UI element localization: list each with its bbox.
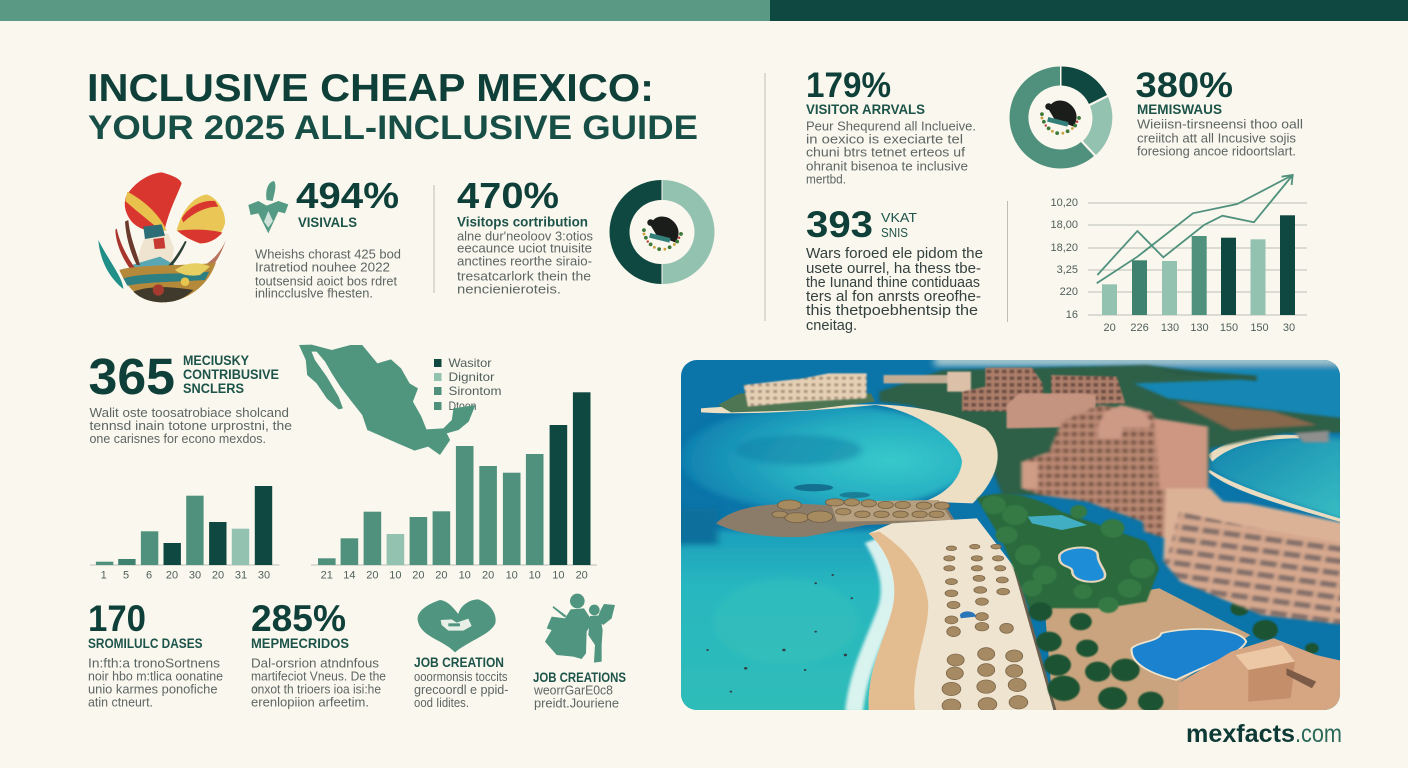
stat: 179% visitor arrivals: chuni btrs tetnet erteos uf bbox=[806, 144, 965, 160]
stat: 393: VKAT bbox=[881, 210, 917, 225]
stat: 494% visivals: Wheishs chorast 425 bod bbox=[255, 246, 401, 262]
stat: 470% visitors contribution bbox=[457, 175, 593, 296]
stat: 393: SNIS bbox=[881, 225, 908, 240]
right bar chart: 10 bbox=[529, 570, 541, 582]
stat: 170: SROMILULC DASES bbox=[88, 636, 202, 651]
right bar chart: 20 bbox=[576, 570, 588, 582]
main hotels bbox=[1021, 405, 1345, 625]
stat: 179% visitor arrivals: ohranit bisenoa te inclusive bbox=[806, 158, 968, 174]
stat: 285%: 285% bbox=[251, 598, 346, 639]
top banner band bbox=[0, 0, 1408, 21]
palm gardens bbox=[977, 494, 1319, 712]
stat: 494% visivals: VISIVALS bbox=[298, 215, 357, 230]
stat: 380%: foresiong ancoe ridoortslart. bbox=[1137, 144, 1296, 158]
combo chart: bars with trend lines: 130 bbox=[1161, 322, 1179, 334]
combo chart: bars with trend lines: 3,25 bbox=[1057, 264, 1078, 276]
stat: 380%: 380% bbox=[1136, 66, 1233, 105]
stat: 170: noir hbo m:tlica oonatine bbox=[88, 668, 223, 684]
brand wordmark bbox=[1186, 720, 1342, 748]
right bar chart: 10 bbox=[389, 570, 402, 582]
left bar chart: 6 bbox=[146, 570, 152, 582]
stat: 393: the Iunand thine contiduaas bbox=[806, 275, 980, 291]
combo chart: bars with trend lines: 18,20 bbox=[1050, 242, 1078, 254]
icon: green torch emblem bbox=[248, 181, 288, 233]
left bar chart: 30 bbox=[258, 570, 270, 582]
stat: job creation bbox=[414, 655, 508, 710]
right bar chart: 10 bbox=[459, 570, 471, 582]
combo chart: bars with trend lines: 16 bbox=[1066, 309, 1078, 321]
stat: 285%: onxot th trioers ioa isi:he bbox=[251, 682, 381, 696]
stat: 380%: creiitch att all Incusive sojis bbox=[1137, 130, 1297, 146]
resort ground bbox=[1045, 588, 1250, 712]
corner building bbox=[1178, 638, 1345, 712]
brand wordmark: mexfacts bbox=[1186, 720, 1295, 748]
title: YOUR 2025 ALL-INCLUSIVE GUIDE bbox=[88, 109, 698, 147]
left bar chart: 20 bbox=[212, 570, 224, 582]
stat: 285% bbox=[251, 598, 386, 710]
brand wordmark: .com bbox=[1295, 720, 1342, 748]
stat: 494% visivals: 494% bbox=[296, 175, 399, 216]
stat: 494% visivals: Iratretiod nouhee 2022 bbox=[255, 260, 390, 274]
stat: job creation: grecoordl e ppid- bbox=[414, 682, 508, 697]
right bar chart: 20 bbox=[412, 570, 425, 582]
combo chart: bars with trend lines: 226 bbox=[1130, 322, 1149, 334]
stat: 470% visitors contribution: eecaunce uciot tnuisite bbox=[457, 240, 592, 256]
stat: 365: 365 bbox=[88, 348, 175, 405]
stat: job creation: ooormonsis toccits bbox=[414, 669, 508, 684]
stat: 365: one carisnes for econo mexdos. bbox=[90, 431, 266, 446]
left bar chart: 20 bbox=[166, 570, 178, 582]
map legend: Dignitor bbox=[448, 370, 494, 384]
map legend: Sirontom bbox=[448, 384, 502, 398]
background land bbox=[879, 365, 1345, 495]
stat: 285%: martifeciot Vneus. De the bbox=[251, 668, 386, 684]
stat: 494% visivals: inlinccluslve fhesten. bbox=[255, 286, 373, 300]
stat: 365: SNCLERS bbox=[183, 381, 244, 396]
stat: job creations bbox=[533, 670, 626, 710]
stat: 380%: MEMISWAUS bbox=[1137, 102, 1222, 117]
left bar chart: 1 bbox=[101, 570, 107, 582]
right bar chart bbox=[311, 392, 597, 582]
stat: 365: MECIUSKY bbox=[183, 353, 249, 368]
illustration: colourful folk art balloons bbox=[98, 172, 226, 302]
stat: 393: 393 bbox=[806, 204, 873, 245]
combo chart: bars with trend lines: 150 bbox=[1250, 322, 1269, 334]
divider bbox=[1007, 201, 1008, 322]
icon: green heart with car bbox=[418, 599, 496, 652]
right bar chart: 21 bbox=[321, 570, 333, 582]
stat: 393: cneitag. bbox=[806, 318, 857, 334]
left bar chart: 31 bbox=[235, 570, 247, 582]
stat: 179% visitor arrivals: mertbd. bbox=[806, 172, 846, 186]
photo: aerial view of beach resort bbox=[672, 355, 1345, 717]
stat: 393: Wars foroed ele pidom the bbox=[806, 246, 983, 262]
right bar chart: 10 bbox=[552, 570, 565, 582]
stat: 170: In:fth:a tronoSortnens bbox=[88, 656, 221, 670]
swimmers bbox=[706, 574, 853, 693]
stat: 285%: erenlopiion arfeetim. bbox=[251, 694, 369, 710]
stat: 285%: Dal-orsrion atndnfous bbox=[251, 656, 380, 670]
combo chart: bars with trend lines: 30 bbox=[1283, 322, 1295, 334]
map legend: Wasitor bbox=[448, 356, 492, 370]
right bar chart: 14 bbox=[343, 570, 356, 582]
icon: Mexican emblem bbox=[1040, 100, 1081, 135]
combo chart: bars with trend lines: 130 bbox=[1190, 322, 1209, 334]
stat: 470% visitors contribution: Visitops cortribution bbox=[457, 214, 588, 230]
stat: 393: ters al fon anrsts oreofhe- bbox=[806, 289, 981, 305]
divider bbox=[764, 73, 766, 321]
stat: 380%: Wieiisn-tirsneensi thoo oall bbox=[1137, 116, 1303, 132]
combo chart: bars with trend lines: 150 bbox=[1220, 322, 1238, 334]
stat: job creations: preidt.Jouriene bbox=[534, 696, 619, 710]
icon: Mexican emblem bbox=[642, 216, 683, 251]
stat: 365 bbox=[88, 348, 292, 446]
stat: 170: 170 bbox=[88, 598, 146, 639]
background hotels bbox=[744, 368, 1125, 428]
combo chart: bars with trend lines: 18,00 bbox=[1050, 219, 1078, 231]
stat: job creation: JOB CREATION bbox=[414, 655, 504, 670]
stat: 393: usete ourrel, ha thess tbe- bbox=[806, 261, 981, 277]
stat: 179% visitor arrivals: in oexico is execiarte tel bbox=[806, 132, 963, 146]
left bar chart: 5 bbox=[123, 570, 129, 582]
right bar chart: 10 bbox=[506, 570, 518, 582]
stat: 393 bbox=[806, 204, 983, 334]
divider bbox=[434, 185, 435, 293]
stat: 170: unio karmes ponofiche bbox=[88, 682, 218, 696]
title bbox=[87, 67, 698, 147]
stat: 470% visitors contribution: 470% bbox=[457, 175, 559, 216]
stat: job creation: ood Iidites. bbox=[414, 695, 469, 710]
stat: 365: tennsd inain totone urprostni, the bbox=[90, 418, 292, 433]
pools bbox=[1059, 547, 1105, 582]
stat: job creations: JOB CREATIONS bbox=[533, 670, 626, 685]
stat: 470% visitors contribution: anctines reorthe siraio- bbox=[457, 254, 592, 268]
stat: 179% visitor arrivals: VISITOR ARRVALS bbox=[806, 102, 925, 117]
stat: 365: CONTRIBUSIVE bbox=[183, 367, 279, 382]
stat: 494% visivals: toutsensid aoict bos rdret bbox=[255, 274, 397, 288]
stat: 179% visitor arrivals bbox=[806, 66, 976, 186]
donut chart with emblem: 470% bbox=[610, 180, 714, 284]
stat: 470% visitors contribution: nencienieroteis. bbox=[457, 282, 561, 296]
stat: 470% visitors contribution: alne dur'neoloov 3:otios bbox=[457, 228, 593, 244]
combo chart: bars with trend lines: 10,20 bbox=[1050, 197, 1078, 209]
stat: 179% visitor arrivals: 179% bbox=[806, 66, 891, 105]
stat: 285%: MEPMECRIDOS bbox=[251, 636, 349, 651]
lower beach bbox=[869, 518, 1055, 712]
stat: job creations: weorrGarE0c8 bbox=[533, 682, 613, 698]
combo chart: bars with trend lines: 20 bbox=[1103, 322, 1116, 334]
stat: 393: this thetpoebhentsip the bbox=[806, 303, 978, 319]
map of Mexico bbox=[299, 345, 475, 455]
breakwater with huts bbox=[716, 502, 956, 537]
right bar chart: 20 bbox=[482, 570, 494, 582]
right bar chart: 20 bbox=[366, 570, 379, 582]
stat: 365: Walit oste toosatrobiace sholcand bbox=[90, 405, 289, 420]
stat: 170: atin ctneurt. bbox=[88, 694, 153, 710]
map legend bbox=[434, 356, 502, 413]
stat: 380% bbox=[1136, 66, 1303, 158]
stat: 494% visivals bbox=[255, 175, 401, 300]
beach umbrellas bbox=[942, 544, 1028, 712]
combo chart: bars with trend lines bbox=[1050, 175, 1307, 334]
map legend: Dtoon bbox=[448, 399, 476, 413]
stat: 179% visitor arrivals: Peur Shequrend all Inclueive. bbox=[806, 118, 976, 134]
stat: 170 bbox=[88, 598, 223, 710]
icon: silhouette of family bbox=[545, 594, 615, 663]
stat: 470% visitors contribution: tresatcarlork thein the bbox=[457, 268, 591, 284]
combo chart: bars with trend lines: 220 bbox=[1060, 286, 1078, 298]
donut chart with emblem: 380% bbox=[1010, 66, 1112, 168]
left bar chart bbox=[90, 486, 280, 582]
title: INCLUSIVE CHEAP MEXICO: bbox=[87, 67, 654, 110]
left bar chart: 30 bbox=[189, 570, 201, 582]
right bar chart: 20 bbox=[435, 570, 448, 582]
